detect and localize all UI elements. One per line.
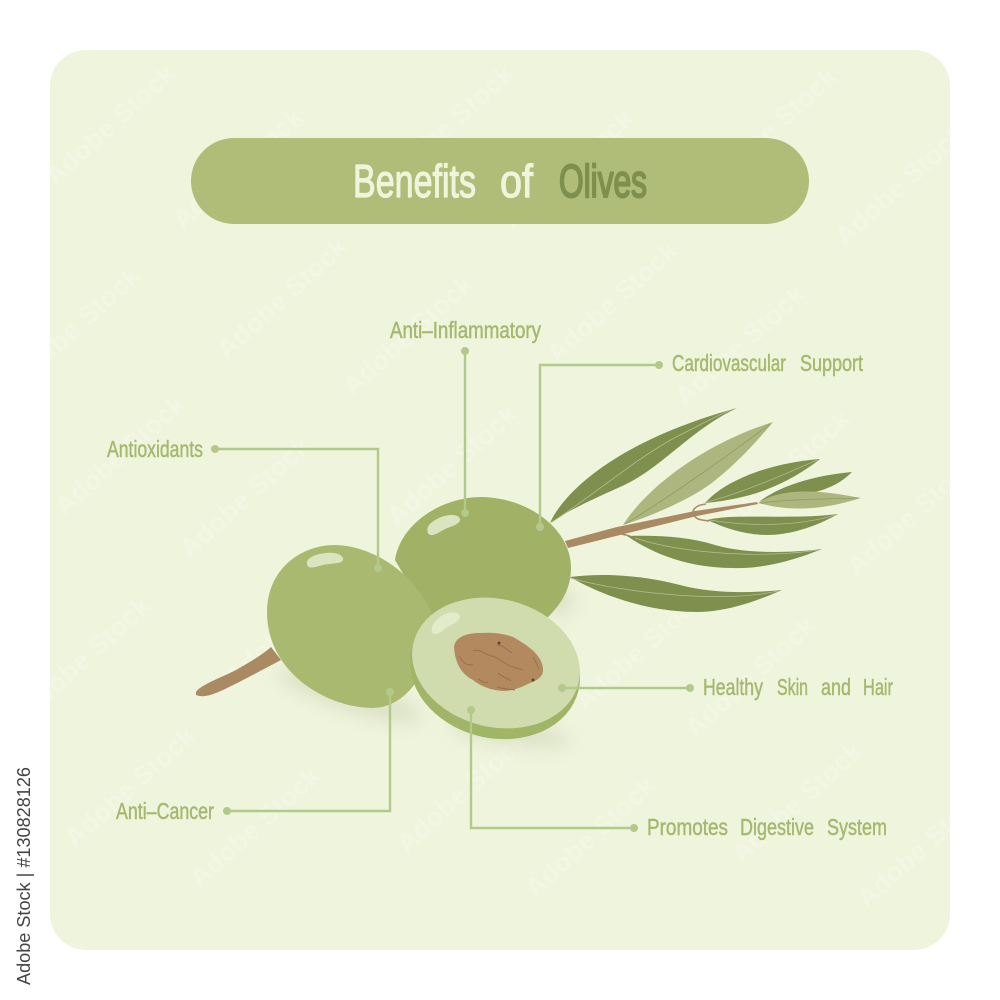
watermark pattern: Adobe Stock — [497, 103, 640, 236]
watermark pattern: Adobe Stock — [377, 58, 520, 191]
highlight: left olive — [307, 553, 343, 568]
callout: Cardiovascular Support — [536, 350, 863, 531]
watermark pattern: Adobe Stock — [569, 583, 712, 716]
leaf 1 — [550, 408, 737, 523]
left olive — [267, 545, 433, 708]
callout: Cardiovascular Support: Cardiovascular — [672, 350, 786, 376]
callout: Antioxidants — [107, 436, 382, 572]
side credit text: Adobe Stock | #130828126 — [13, 767, 34, 985]
leaf stalk curl — [617, 504, 709, 536]
highlight: flesh — [432, 612, 460, 634]
leaf 8 — [570, 575, 782, 612]
callout: Promotes Digestive System: System — [827, 814, 887, 840]
watermark pattern: Adobe Stock — [701, 61, 844, 194]
branch — [565, 502, 758, 548]
callout: Promotes Digestive System — [467, 706, 887, 840]
watermark pattern: Adobe Stock — [49, 388, 192, 521]
title pill — [191, 138, 809, 224]
watermark pattern: Adobe Stock — [219, 558, 362, 691]
rim — [395, 583, 595, 757]
stem — [196, 647, 281, 696]
watermark pattern: Adobe Stock — [519, 770, 662, 903]
watermark pattern: Adobe Stock — [59, 720, 202, 853]
olive pit — [454, 633, 543, 691]
callout: Promotes Digestive System: Digestive — [740, 814, 814, 840]
callout: Healthy Skin and Hair: and — [821, 674, 851, 700]
watermark pattern: Adobe Stock — [14, 590, 157, 723]
title text: Benefits — [353, 155, 476, 207]
highlight: back olive — [427, 515, 460, 535]
callout: Healthy Skin and Hair — [558, 674, 893, 700]
callout: Anti-Cancer: Anti–Cancer — [116, 798, 214, 824]
title text: of — [500, 155, 533, 207]
callout: Healthy Skin and Hair: Healthy — [703, 674, 763, 700]
watermark pattern: Adobe Stock — [174, 430, 317, 563]
leaf 4 — [760, 472, 852, 501]
watermark pattern: Adobe Stock — [541, 235, 684, 368]
watermark pattern: Adobe Stock — [184, 760, 327, 893]
flesh — [398, 580, 594, 746]
leaf 2 — [623, 422, 773, 525]
watermark pattern: Adobe Stock — [679, 610, 822, 743]
leaf 6 — [707, 514, 838, 535]
callout: Antioxidants: Antioxidants — [107, 436, 203, 462]
callout: Healthy Skin and Hair: Hair — [863, 674, 893, 700]
watermark pattern: Adobe Stock — [726, 735, 869, 868]
half olive — [395, 580, 595, 757]
watermark pattern: Adobe Stock — [851, 780, 994, 913]
watermark pattern: Adobe Stock — [39, 58, 182, 191]
watermark pattern: Adobe Stock — [669, 278, 812, 411]
watermark pattern: Adobe Stock — [829, 118, 972, 251]
callout: Healthy Skin and Hair: Skin — [777, 674, 808, 700]
leaf 3 — [705, 459, 820, 503]
callout: Anti-Inflammatory: Anti–Inflammatory — [390, 317, 541, 343]
watermark pattern: Adobe Stock — [381, 398, 524, 531]
callout: Promotes Digestive System: Promotes — [647, 814, 728, 840]
callout: Anti-Cancer — [116, 688, 394, 824]
leaf 7 — [627, 536, 822, 568]
olive shadows — [274, 588, 574, 753]
watermark pattern: Adobe Stock — [391, 725, 534, 858]
watermark pattern: Adobe Stock — [841, 448, 984, 581]
back olive — [395, 497, 571, 620]
olive branch with leaves — [550, 408, 861, 612]
callout: Anti-Inflammatory — [390, 317, 541, 517]
watermark pattern: Adobe Stock — [167, 101, 310, 234]
watermark pattern: Adobe Stock — [714, 403, 857, 536]
watermark pattern: Adobe Stock — [337, 268, 480, 401]
callout: Cardiovascular Support: Support — [800, 350, 863, 376]
title text: Olives — [559, 155, 647, 207]
leaf 5 — [758, 491, 861, 509]
watermark pattern: Adobe Stock — [4, 260, 147, 393]
title text — [353, 155, 647, 207]
watermark pattern: Adobe Stock — [211, 231, 354, 364]
